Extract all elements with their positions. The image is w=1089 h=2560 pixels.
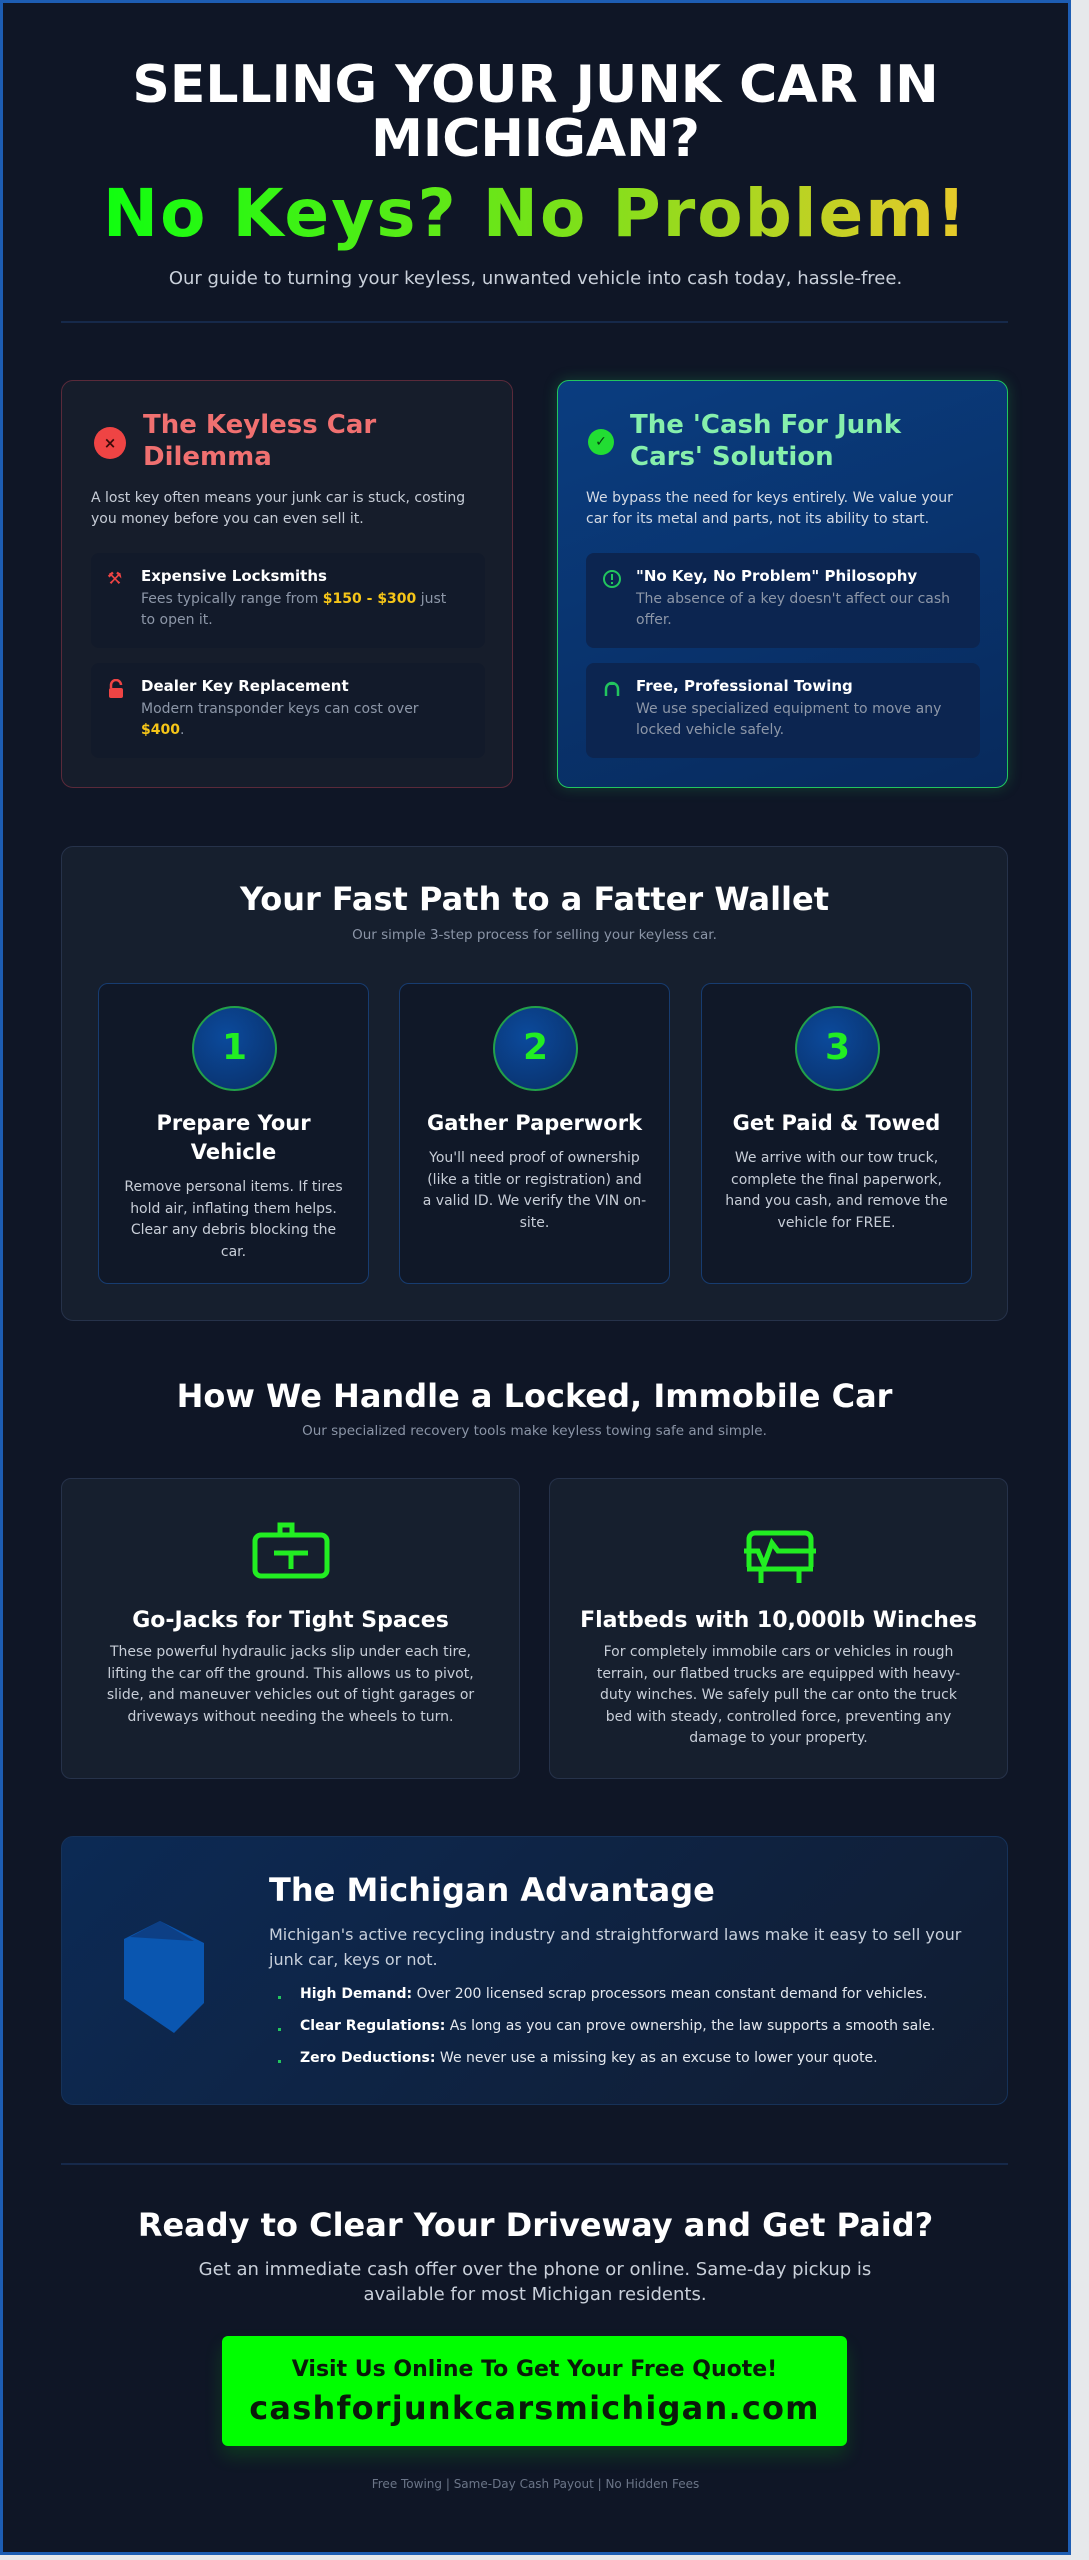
icon: jack bbox=[252, 1522, 330, 1578]
title bbox=[132, 55, 939, 169]
heading: Cars' Solution bbox=[630, 442, 834, 472]
text: We bypass the need for keys entirely. We value your car for its metal and parts, not its ability to start. bbox=[586, 490, 953, 527]
item: towing bbox=[586, 663, 980, 758]
icon: check: ✓ bbox=[595, 434, 607, 450]
step 2: You'll need proof of ownership (like a title or registration) and a valid ID. We verify the VIN on-site. bbox=[423, 1150, 646, 1230]
button: cashforjunkcarsmichigan.com bbox=[249, 2389, 820, 2427]
item: dealer key: Dealer Key Replacement bbox=[141, 677, 349, 695]
step 3: We arrive with our tow truck, complete the final paperwork, hand you cash, and remove the vehicle for FREE. bbox=[725, 1150, 948, 1230]
subheading: Our specialized recovery tools make keyless towing safe and simple. bbox=[302, 1423, 767, 1439]
button: Visit Us Online To Get Your Free Quote! bbox=[292, 2357, 777, 2382]
card: go-jacks: These powerful hydraulic jacks slip under each tire, lifting the car off the ground. This allows us to pivot, slide, and maneuver vehicles out of tight garages or driveways without needing the wheels to turn. bbox=[107, 1644, 474, 1724]
step 1 bbox=[98, 983, 369, 1284]
panel: michigan advantage bbox=[61, 1836, 1008, 2105]
step 2: 2 bbox=[523, 1027, 548, 1068]
item: dealer key: Modern transponder keys can cost over $400. bbox=[141, 701, 419, 738]
card: flatbeds bbox=[549, 1478, 1008, 1779]
heading: The 'Cash For Junk bbox=[630, 410, 901, 440]
bullets bbox=[278, 1986, 935, 2066]
step 1: Vehicle bbox=[191, 1140, 276, 1164]
footer note: Free Towing | Same-Day Cash Payout | No Hidden Fees bbox=[372, 2477, 699, 2491]
subheading: Our simple 3-step process for selling your keyless car. bbox=[352, 927, 717, 943]
step 2: Gather Paperwork bbox=[427, 1111, 642, 1135]
card: flatbeds: For completely immobile cars or vehicles in rough terrain, our flatbed trucks are equipped with heavy-duty winches. We safely pull the car onto the truck bed with steady, controlled force, preventing any damage to your property. bbox=[597, 1644, 960, 1746]
icon: check bbox=[588, 429, 614, 455]
icon: michigan shield bbox=[124, 1921, 204, 2033]
icon: x circle: × bbox=[104, 434, 116, 452]
step 3 bbox=[701, 983, 972, 1284]
bullets: Clear Regulations: As long as you can prove ownership, the law supports a smooth sale. bbox=[300, 2018, 935, 2034]
title: MICHIGAN? bbox=[371, 109, 700, 169]
heading: locked car: How We Handle a Locked, Immobile Car bbox=[177, 1377, 892, 1415]
card: flatbeds: Flatbeds with 10,000lb Winches bbox=[580, 1608, 977, 1633]
heading bbox=[143, 410, 376, 472]
heading: Dilemma bbox=[143, 442, 272, 472]
step 3: 3 bbox=[825, 1027, 850, 1068]
item: locksmiths: Expensive Locksmiths bbox=[141, 567, 327, 585]
bullets: High Demand: Over 200 licensed scrap processors mean constant demand for vehicles. bbox=[300, 1986, 927, 2002]
cta text: Get an immediate cash offer over the phone or online. Same-day pickup is available for most Michigan residents. bbox=[199, 2259, 871, 2305]
card: go-jacks: Go-Jacks for Tight Spaces bbox=[132, 1608, 449, 1633]
panel: fast path bbox=[61, 846, 1008, 1321]
card: go-jacks bbox=[61, 1478, 520, 1779]
item: philosophy: "No Key, No Problem" Philosophy bbox=[636, 567, 917, 585]
text: Michigan's active recycling industry and straightforward laws make it easy to sell your junk car, keys or not. bbox=[269, 1925, 961, 1969]
step 1: 1 bbox=[222, 1027, 247, 1068]
title: SELLING YOUR JUNK CAR IN bbox=[132, 55, 939, 115]
panel: keyless dilemma bbox=[61, 380, 513, 788]
bullets: Zero Deductions: We never use a missing key as an excuse to lower your quote. bbox=[300, 2050, 878, 2066]
item: towing: We use specialized equipment to move any locked vehicle safely. bbox=[636, 701, 941, 738]
step 2 bbox=[399, 983, 670, 1284]
step 3: Get Paid & Towed bbox=[733, 1111, 940, 1135]
tagline: No Keys? No Problem! bbox=[103, 175, 968, 252]
icon: winch bbox=[744, 1530, 816, 1583]
heading: fast path: Your Fast Path to a Fatter Wallet bbox=[240, 880, 829, 918]
step 1: Prepare Your bbox=[156, 1111, 311, 1135]
item: dealer key bbox=[91, 663, 485, 758]
item: philosophy bbox=[586, 553, 980, 648]
step 1: Remove personal items. If tires hold air, inflating them helps. Clear any debris blocking the car. bbox=[124, 1179, 343, 1260]
heading: cta: Ready to Clear Your Driveway and Get Paid? bbox=[138, 2206, 933, 2244]
item: locksmiths: ⚒ bbox=[107, 569, 122, 589]
subtitle: Our guide to turning your keyless, unwanted vehicle into cash today, hassle-free. bbox=[169, 268, 902, 289]
item: locksmiths: Fees typically range from $150 - $300 just to open it. bbox=[141, 591, 446, 628]
item: locksmiths bbox=[91, 553, 485, 648]
heading bbox=[630, 410, 902, 472]
button bbox=[222, 2336, 847, 2446]
text: A lost key often means your junk car is stuck, costing you money before you can even sell it. bbox=[91, 490, 465, 527]
item: philosophy: The absence of a key doesn't affect our cash offer. bbox=[636, 591, 950, 628]
heading: The Keyless Car bbox=[143, 410, 376, 440]
heading: The Michigan Advantage bbox=[269, 1871, 715, 1909]
panel: solution bbox=[557, 380, 1008, 788]
icon: x circle bbox=[94, 427, 126, 459]
item: towing: Free, Professional Towing bbox=[636, 677, 853, 695]
